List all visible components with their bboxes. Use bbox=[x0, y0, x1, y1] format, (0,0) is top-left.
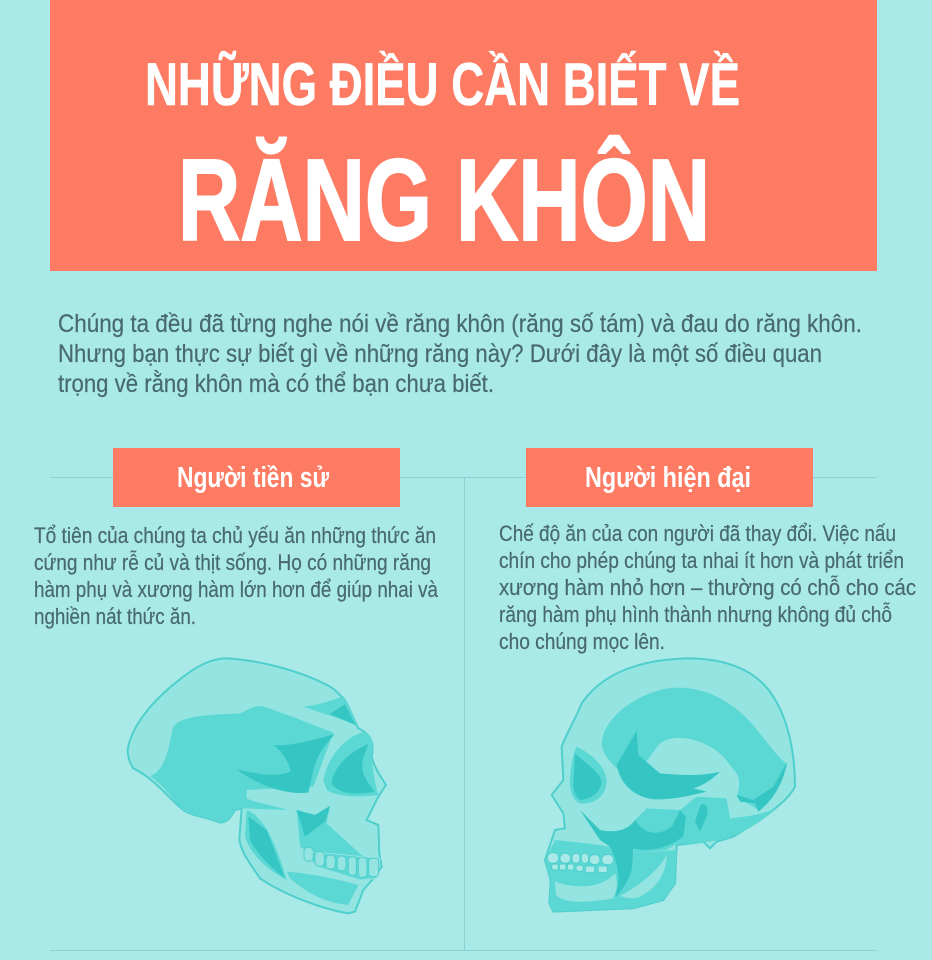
title line 2: RĂNG KHÔN bbox=[178, 135, 710, 265]
heading: modern people: Người hiện đại bbox=[585, 462, 751, 494]
text: modern diet bbox=[499, 521, 916, 654]
heading: prehistoric people: Người tiền sử bbox=[177, 462, 329, 494]
intro text bbox=[58, 310, 862, 398]
text: modern diet: cho chúng mọc lên. bbox=[499, 629, 665, 654]
intro text: Chúng ta đều đã từng nghe nói về răng khôn (răng số tám) và đau do răng khôn. bbox=[58, 310, 862, 338]
heading: prehistoric people bbox=[113, 448, 400, 507]
title banner bbox=[50, 0, 877, 271]
text: prehistoric diet: nghiền nát thức ăn. bbox=[34, 604, 196, 629]
text: prehistoric diet: Tổ tiên của chúng ta chủ yếu ăn những thức ăn bbox=[34, 523, 436, 548]
intro text: trọng về rằng khôn mà có thể bạn chưa biết. bbox=[58, 369, 494, 398]
intro text: Nhưng bạn thực sự biết gì về những răng này? Dưới đây là một số điều quan bbox=[58, 340, 822, 368]
heading: modern people bbox=[526, 448, 813, 507]
skull teeth bbox=[547, 853, 614, 873]
icon: prehistoric skull bbox=[128, 658, 386, 913]
text: prehistoric diet bbox=[34, 523, 438, 629]
title line 1: NHỮNG ĐIỀU CẦN BIẾT VỀ bbox=[145, 51, 740, 118]
text: prehistoric diet: hàm phụ và xương hàm lớn hơn để giúp nhai và bbox=[34, 577, 438, 602]
text: prehistoric diet: cứng như rễ củ và thịt sống. Họ có những răng bbox=[34, 550, 431, 575]
skull teeth bbox=[304, 847, 379, 877]
icon: modern skull bbox=[545, 658, 795, 912]
